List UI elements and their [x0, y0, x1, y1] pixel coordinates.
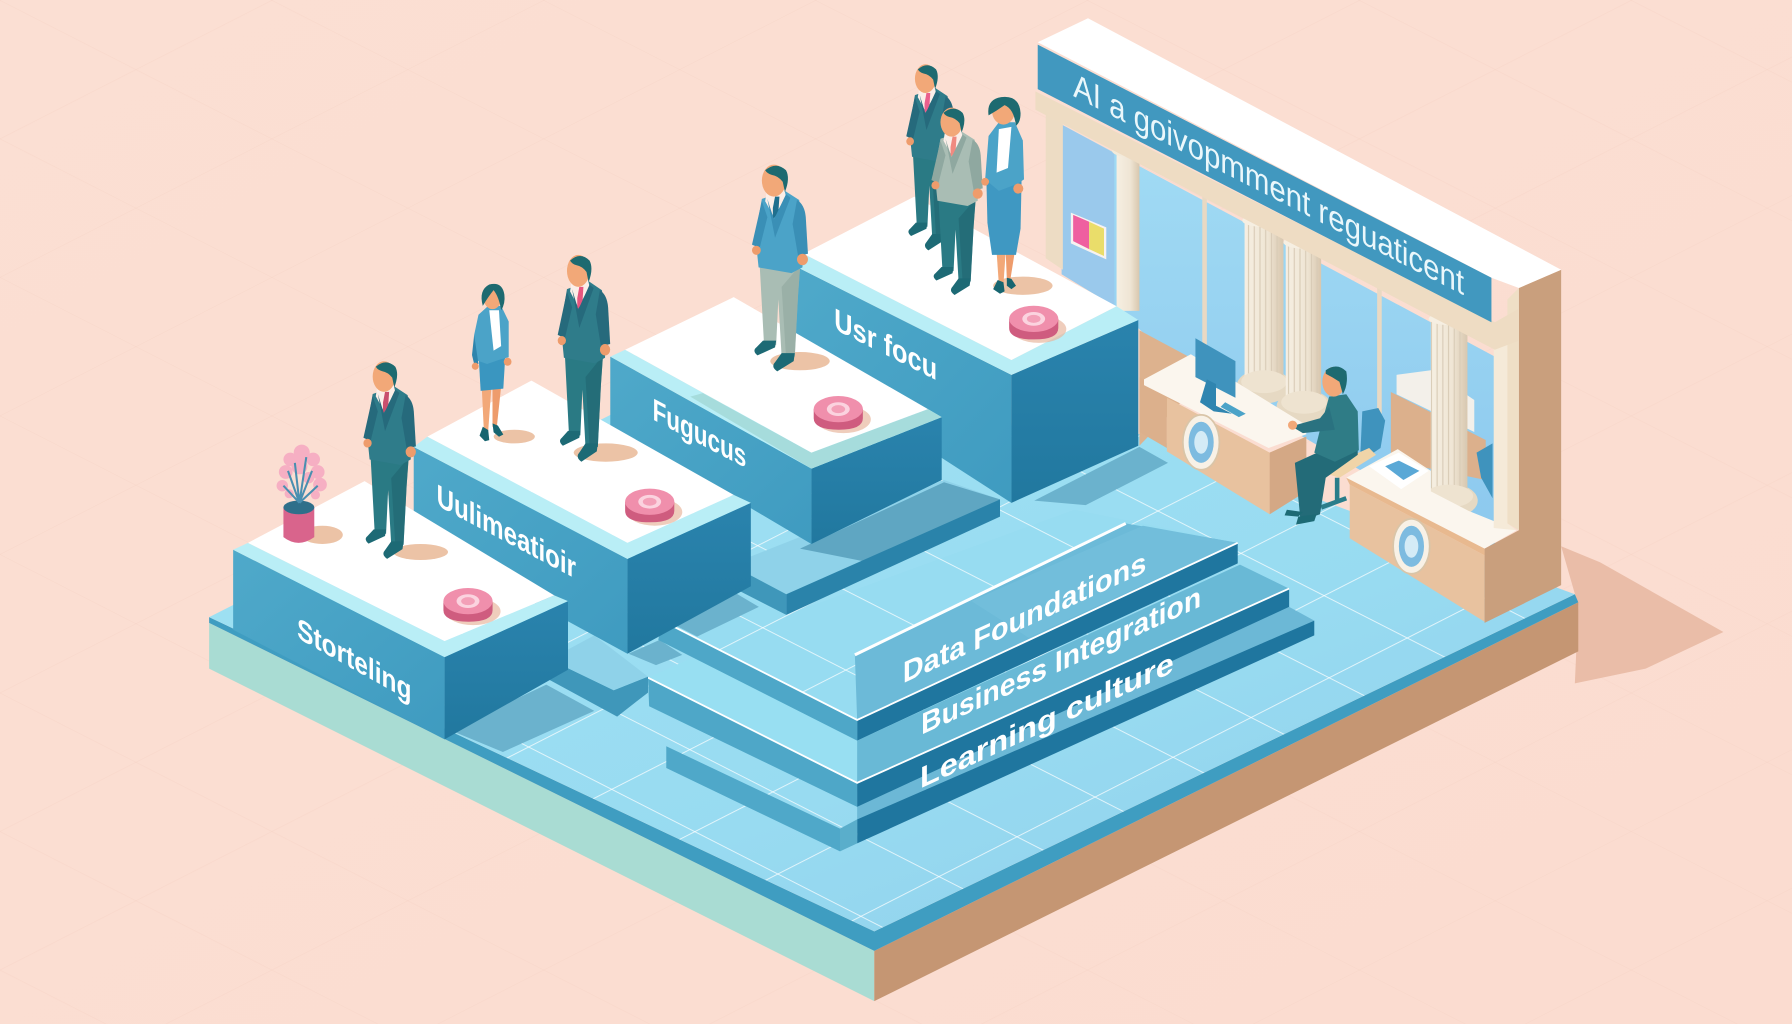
poster	[1071, 213, 1106, 259]
tier: Learning culture	[666, 607, 1314, 851]
step 2: Ulimeation	[414, 381, 751, 654]
building shadow on ground	[1561, 546, 1723, 683]
puck step 3	[814, 396, 871, 433]
tier: Data Foundations	[658, 510, 1238, 741]
person: man step 2	[558, 255, 610, 462]
emblem	[1393, 519, 1430, 574]
cabinet with papers	[1391, 370, 1486, 480]
platform base	[206, 389, 1589, 1001]
right chair	[1477, 443, 1493, 498]
label: Storteling: Storteling	[297, 611, 411, 708]
office chair	[1318, 408, 1385, 507]
column 3	[1277, 236, 1331, 424]
shadow man step 2	[574, 443, 638, 462]
floor shadows from steps	[450, 447, 1168, 752]
label: Business Integration: Business Integration	[921, 579, 1201, 742]
step 3: Fugucus	[610, 297, 942, 544]
person: man in grey jacket	[931, 108, 983, 295]
label: Data Foundations: Data Foundations	[903, 545, 1146, 690]
sign board	[1038, 45, 1491, 322]
step 4: User focus	[795, 197, 1138, 503]
shadows step 2	[494, 430, 535, 443]
left post	[1046, 103, 1063, 270]
left desk	[1139, 354, 1306, 514]
right desk	[1346, 449, 1517, 622]
plant	[277, 445, 343, 544]
tan wall behind left desk	[1139, 330, 1189, 446]
roof top	[1038, 18, 1561, 288]
right pier	[1485, 270, 1561, 623]
column 4	[1421, 313, 1478, 518]
puck step 1	[443, 588, 501, 625]
small step blocks on floor	[550, 480, 1000, 717]
sign text: AI a goivopmment reguaticent	[1073, 65, 1464, 303]
step 1: Storytelling	[233, 481, 568, 739]
emblem	[1183, 415, 1219, 470]
people group on step 4	[906, 64, 1053, 295]
building	[1035, 18, 1561, 623]
shadow man step 1	[393, 544, 448, 560]
person: woman step 2	[472, 284, 512, 441]
label: Usr focu: Usr focu	[834, 301, 937, 387]
entablature band	[1035, 91, 1519, 350]
back window wall	[1062, 125, 1495, 549]
person: man step 1	[363, 361, 416, 559]
seated official	[1285, 367, 1359, 525]
person: man at back	[906, 64, 955, 250]
person: woman in blue dress	[981, 97, 1024, 294]
monitor	[1195, 338, 1246, 417]
column 1	[1112, 145, 1142, 311]
person: man in blue jacket	[752, 165, 808, 371]
tier: Business Integration	[648, 565, 1289, 807]
puck step 2	[625, 489, 682, 526]
column 2	[1237, 214, 1291, 403]
puck step 4	[1009, 306, 1066, 343]
floor surface with tile grid	[206, 389, 1589, 937]
shadow under step 3 man	[770, 352, 830, 370]
label: Uulimeatioir: Uulimeatioir	[437, 477, 576, 586]
label: Learning culture: Learning culture	[920, 645, 1174, 795]
label: Fugucus: Fugucus	[653, 391, 746, 475]
